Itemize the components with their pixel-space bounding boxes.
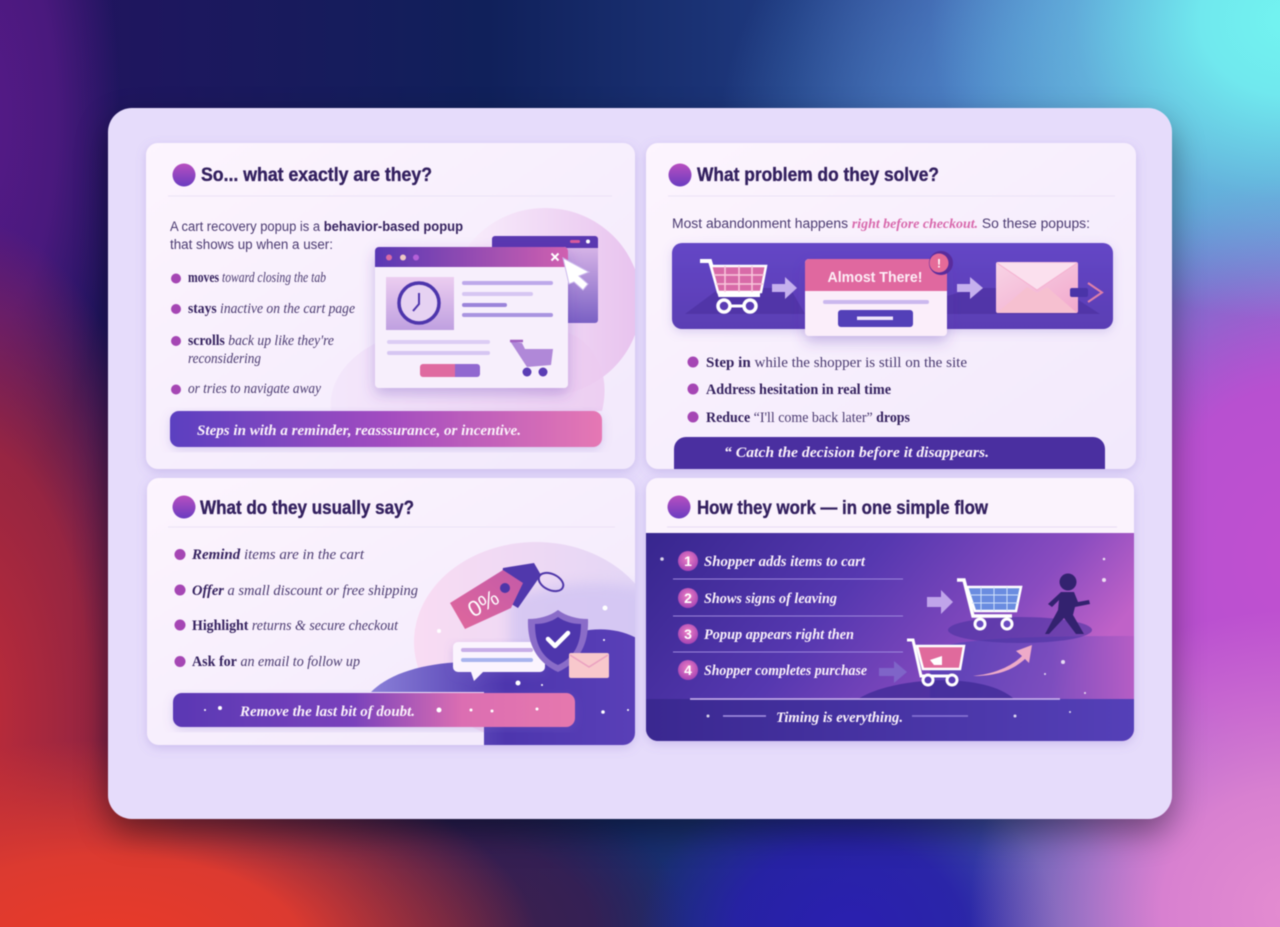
step list: 3 — [684, 626, 692, 642]
badge — [929, 251, 953, 275]
step list: Shopper adds items to cart — [704, 554, 866, 570]
main panel — [108, 108, 1172, 819]
icon: shield — [528, 610, 588, 672]
bullet list: Reduce “I'll come back later” drops — [706, 410, 910, 426]
cart — [510, 341, 553, 376]
bullet list: Ask for an email to follow up — [192, 654, 360, 670]
cursor — [563, 258, 589, 290]
step list: 1 — [684, 553, 692, 569]
callout banner — [173, 693, 575, 727]
step list: Shows signs of leaving — [704, 591, 837, 607]
step list: 2 — [684, 590, 692, 606]
icon: envelope — [569, 653, 609, 678]
panel: what exactly are they — [146, 143, 641, 469]
callout banner: “ Catch the decision before it disappears. — [724, 445, 989, 461]
bullet list: Remind items are in the cart — [191, 547, 365, 563]
intro text — [170, 219, 463, 252]
panel: what problem do they solve — [646, 143, 1136, 469]
callout banner — [674, 437, 1105, 469]
front window — [375, 247, 568, 388]
back window — [492, 236, 598, 323]
heading: what do they say: What do they usually say? — [200, 498, 414, 519]
step list: Shopper completes purchase — [704, 663, 867, 679]
bullet list — [171, 270, 355, 397]
step list — [673, 551, 903, 680]
bullet list: scrolls back up like they're — [188, 333, 334, 349]
bullet list: Highlight returns & secure checkout — [192, 618, 399, 634]
callout banner: Remove the last bit of doubt. — [239, 704, 415, 720]
bullet list — [688, 355, 967, 426]
icon: pink cart — [907, 640, 964, 685]
illustration: popup window — [331, 208, 641, 411]
heading: what problem: What problem do they solve? — [697, 165, 939, 186]
arrow: growth — [973, 645, 1032, 676]
callout banner: Steps in with a reminder, reasssurance, or incentive. — [197, 423, 521, 439]
arrow: send — [1070, 283, 1102, 302]
icon: blue cart — [957, 580, 1021, 629]
footer strip — [646, 699, 1134, 741]
bullet list: stays inactive on the cart page — [188, 301, 355, 317]
flow illustration band — [672, 243, 1113, 336]
popup: almost there — [805, 259, 947, 336]
heading: so what exactly: So... what exactly are they? — [201, 165, 432, 186]
bullet list — [174, 547, 418, 670]
intro text: A cart recovery popup is a behavior-based popup — [170, 219, 463, 234]
bullet list: reconsidering — [188, 351, 261, 367]
callout: timing: Timing is everything. — [776, 710, 903, 726]
bullet list: Address hesitation in real time — [706, 382, 891, 398]
icon: walking shopper — [1045, 574, 1090, 634]
bullet list: moves toward closing the tab — [188, 270, 326, 286]
panel: how they work — [646, 478, 1134, 741]
bullet list: Offer a small discount or free shipping — [192, 583, 418, 599]
panel: what do they usually say — [147, 478, 658, 745]
icon: envelope — [996, 262, 1078, 313]
icon: chat bubble — [453, 642, 545, 681]
step list: 4 — [684, 662, 692, 678]
heading: how they work: How they work — in one simple flow — [697, 498, 988, 519]
icon: shopping cart — [700, 261, 766, 312]
illustration: offer and trust — [371, 542, 658, 745]
arrow — [879, 661, 907, 683]
intro text: that shows up when a user: — [170, 237, 333, 252]
step list: Popup appears right then — [704, 627, 854, 643]
intro text: Most abandonment happens right before checkout. So these popups: — [672, 216, 1090, 231]
flow scene — [646, 533, 1134, 741]
arrow — [957, 277, 983, 299]
arrow — [927, 590, 953, 614]
bullet list: Step in while the shopper is still on the site — [706, 355, 967, 371]
icon: price tag: 0% — [463, 585, 503, 622]
bullet list: or tries to navigate away — [188, 381, 321, 397]
popup: almost there: Almost There! — [828, 269, 922, 286]
callout banner — [170, 411, 602, 447]
arrow — [772, 277, 797, 299]
icon: price tag — [450, 563, 566, 629]
badge: ! — [937, 256, 941, 270]
